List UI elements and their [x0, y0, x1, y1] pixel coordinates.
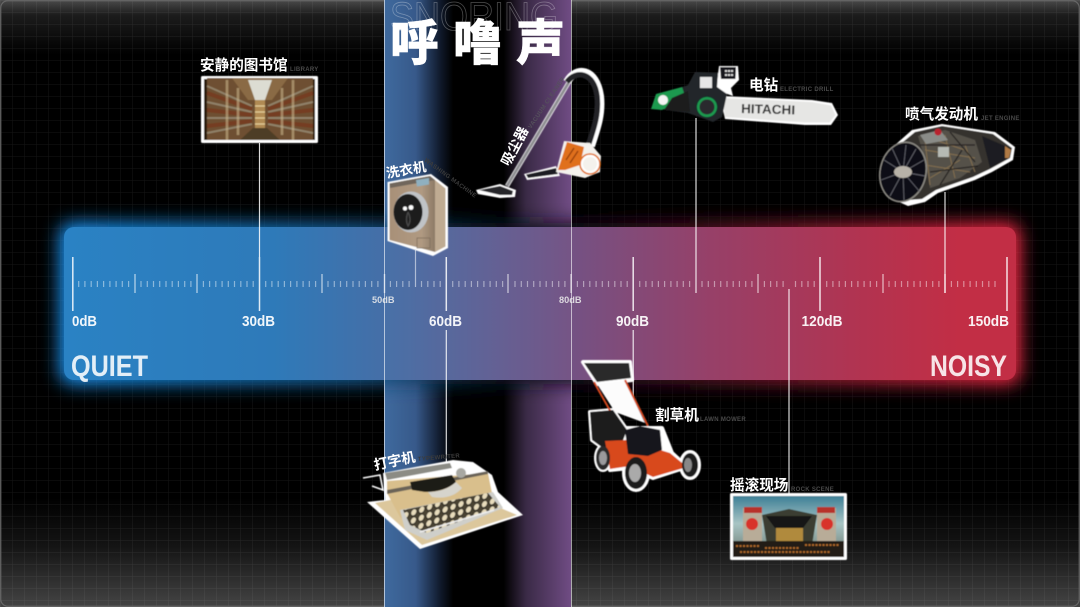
mower silhouette outline [583, 362, 699, 490]
washing machine icon [388, 174, 448, 256]
library label: LIBRARY [290, 67, 319, 73]
scale labels: 60dB [429, 314, 462, 330]
scale labels: 150dB [968, 314, 1009, 330]
scale labels: 30dB [242, 314, 275, 330]
scale labels: 0dB [72, 314, 97, 330]
electric drill icon: HITACHI [741, 101, 795, 117]
washing machine label: 洗衣机 [385, 158, 428, 181]
library photo [201, 76, 318, 143]
rock scene label [730, 476, 834, 494]
item: rock scene [730, 476, 847, 560]
label: quiet: QUIET [71, 349, 148, 382]
leader lines [260, 118, 945, 494]
electric drill label: ELECTRIC DRILL [780, 87, 834, 93]
mid ticks [135, 274, 945, 293]
vacuum cleaner icon [476, 72, 601, 198]
lawn mower label [655, 407, 746, 424]
typewriter label: TYPEWRITER [418, 453, 461, 463]
rock scene photo [730, 493, 847, 560]
item: electric drill [651, 66, 838, 125]
item: lawn mower [583, 362, 746, 490]
scale labels: 80dB [559, 295, 582, 306]
library label [200, 56, 319, 74]
lawn mower label: LAWN MOWER [700, 417, 746, 423]
library label: 安静的图书馆 [200, 56, 288, 74]
decibel scale [73, 257, 1007, 311]
vacuum cleaner label: 吸尘器 [498, 124, 531, 168]
vacuum cleaner label [498, 76, 567, 168]
scale labels: 90dB [616, 314, 649, 330]
scale labels [72, 295, 1009, 330]
washing machine label [385, 158, 477, 200]
lawn mower label: 割草机 [655, 407, 699, 424]
item: library [200, 56, 319, 143]
scale labels: 120dB [802, 314, 842, 330]
typewriter label [372, 449, 461, 473]
item: washing machine [385, 158, 477, 256]
major ticks [73, 257, 1007, 311]
jet engine label: JET ENGINE [981, 116, 1020, 122]
decibel bar glow [60, 223, 1020, 384]
rock scene label: ROCK SCENE [791, 487, 834, 493]
rock scene label: 摇滚现场 [730, 476, 788, 494]
item: vacuum cleaner [476, 72, 601, 198]
jet engine label [905, 105, 1020, 123]
range boundary lines [384, 0, 572, 607]
label: noisy: NOISY [930, 349, 1007, 383]
decibel bar [64, 227, 1016, 380]
minor ticks [79, 281, 995, 287]
electric drill label [749, 76, 834, 94]
snoring range column [384, 0, 571, 607]
electric drill label: 电钻 [749, 76, 779, 94]
title: 呼噜声 [390, 17, 579, 71]
jet engine icon [874, 124, 1015, 206]
jet engine label: 喷气发动机 [905, 105, 978, 123]
washing machine label: WASHING MACHINE [423, 158, 477, 200]
item: jet engine [874, 105, 1020, 206]
item: typewriter [363, 449, 523, 549]
vacuum cleaner label: VACUUM CLEANER [528, 76, 567, 130]
scale labels: 50dB [372, 295, 395, 306]
electric drill icon [651, 66, 838, 125]
typewriter icon [363, 460, 523, 549]
lawn mower icon [583, 362, 699, 490]
typewriter label: 打字机 [372, 449, 417, 473]
